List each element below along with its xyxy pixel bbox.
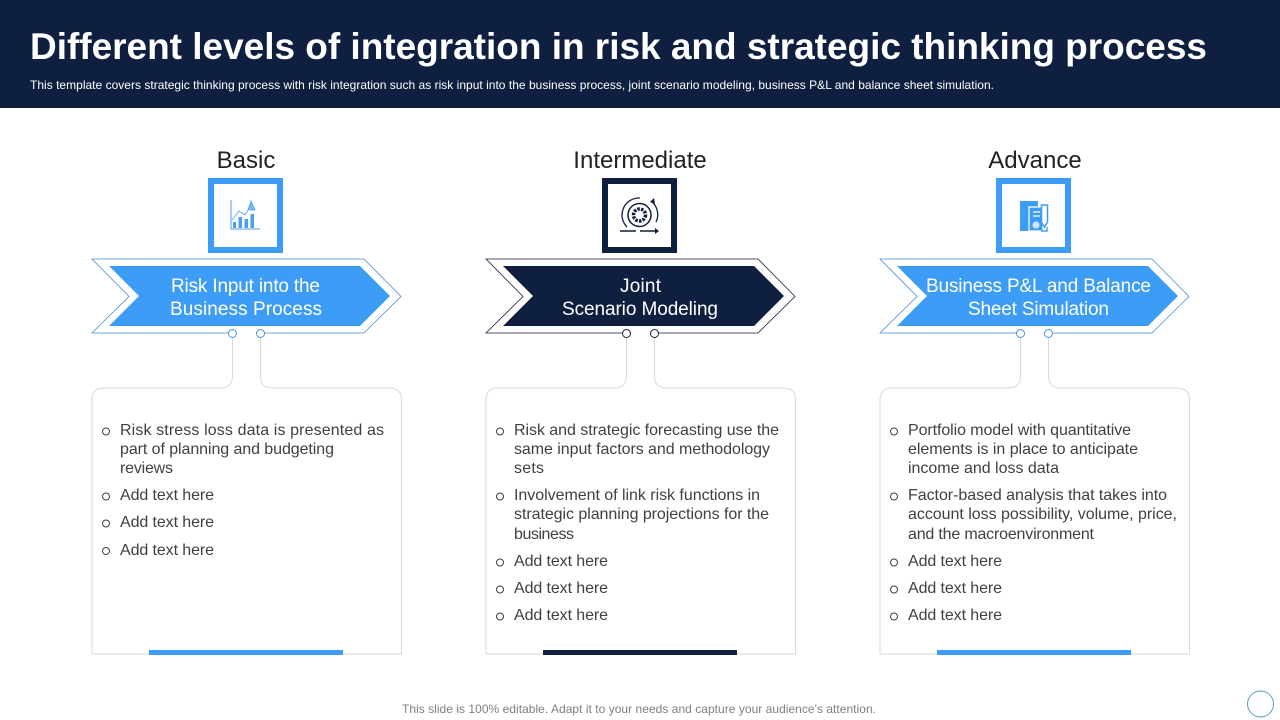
banner text: Risk Input into the — [171, 276, 320, 297]
panel: intermediate — [486, 147, 796, 655]
chevron banner: Sheet Simulation — [968, 299, 1109, 320]
card accent bar — [149, 650, 343, 655]
bullet list: Add text here — [120, 514, 214, 531]
card accent bar — [937, 650, 1131, 655]
bullet list: Involvement of link risk functions in — [514, 487, 760, 504]
chevron banner — [92, 259, 401, 333]
bullet list: Add text here — [908, 553, 1002, 570]
bullet list: reviews — [120, 460, 173, 477]
banner text: Business P&L and Balance — [926, 276, 1151, 297]
subtitle: This template covers strategic thinking process with risk integration such as risk input into the business process, joint scenario modeling, business P&L and balance sheet simulation. — [30, 78, 994, 92]
bullet list: elements is in place to anticipate — [908, 441, 1138, 458]
connector to card — [92, 330, 402, 654]
connector to card — [880, 330, 1190, 654]
card accent bar — [543, 650, 737, 655]
icon: gear with circular arrows — [605, 181, 674, 250]
footer note: This slide is 100% editable. Adapt it to your needs and capture your audience's attention. — [402, 702, 876, 716]
bullet list — [496, 422, 779, 624]
bullet list: Add text here — [514, 607, 608, 624]
bullet list: Add text here — [908, 580, 1002, 597]
icon: rising bar chart with arrow — [211, 181, 280, 250]
chevron banner: Business Process — [170, 299, 322, 320]
bullet list: income and loss data — [908, 460, 1059, 477]
bullet list: Add text here — [514, 580, 608, 597]
banner text: Joint — [620, 276, 662, 297]
chevron banner: Scenario Modeling — [562, 299, 718, 320]
icon: corner circle — [1248, 691, 1274, 717]
bullet list — [102, 422, 384, 559]
bullet list: account loss possibility, volume, price, — [908, 506, 1177, 523]
bullet list: part of planning and budgeting — [120, 441, 334, 458]
bullet list: Risk stress loss data is presented as — [120, 422, 384, 439]
icon: financial documents and pen — [999, 181, 1068, 250]
bullet list — [890, 422, 1177, 624]
bullet list: Factor-based analysis that takes into — [908, 487, 1167, 504]
bullet list: business — [514, 526, 574, 543]
bullet list: Portfolio model with quantitative — [908, 422, 1131, 439]
chevron banner — [880, 259, 1189, 333]
panel: basic — [92, 147, 402, 655]
panel: advance — [880, 147, 1190, 655]
bullet list: Risk and strategic forecasting use the — [514, 422, 779, 439]
title: Different levels of integration in risk and strategic thinking process — [30, 26, 1207, 67]
bullet list: Add text here — [908, 607, 1002, 624]
bullet list: sets — [514, 460, 544, 477]
heading: basic: Basic — [217, 147, 275, 174]
connector to card — [486, 330, 796, 654]
bullet list: strategic planning projections for the — [514, 506, 769, 523]
header band — [0, 0, 1280, 108]
heading: advance: Advance — [988, 147, 1082, 174]
heading: intermediate: Intermediate — [573, 147, 707, 174]
bullet list: Add text here — [120, 487, 214, 504]
bullet list: same input factors and methodology — [514, 441, 770, 458]
chevron banner — [486, 259, 795, 333]
bullet list: Add text here — [514, 553, 608, 570]
bullet list: Add text here — [120, 542, 214, 559]
bullet list: and the macroenvironment — [908, 526, 1095, 543]
